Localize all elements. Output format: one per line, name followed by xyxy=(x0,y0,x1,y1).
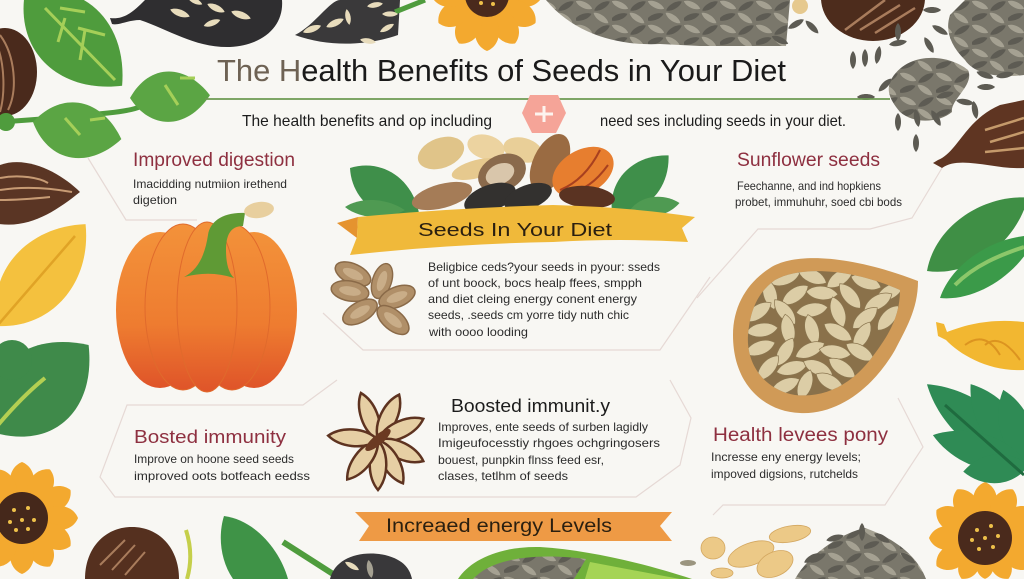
icon: top-left leaf xyxy=(0,0,148,113)
text block: bosted immunity: Improve on hoone seed seeds xyxy=(134,452,294,466)
text block: center description xyxy=(428,260,660,339)
ribbon: increased energy levels xyxy=(355,512,672,541)
ribbon: increased energy levels: Increaed energy Levels xyxy=(386,516,612,537)
title: The Health Benefits of Seeds in Your Diet xyxy=(217,53,786,88)
icon: top dark pod left xyxy=(110,0,282,47)
text block: center description: Beligbice ceds?your seeds in pyour: sseds xyxy=(428,260,660,274)
icon: bottom dark pod xyxy=(330,554,412,579)
icon: right scattered seed pile xyxy=(850,0,1024,152)
text block: sunflower seeds: probet, immuhuhr, soed cbi bods xyxy=(735,195,902,209)
icon: right brown pod xyxy=(933,100,1024,168)
icon: pumpkin xyxy=(116,200,297,392)
text block: health levees pony xyxy=(711,425,889,481)
text block: center description: with oooo looding xyxy=(428,325,528,339)
icon: yellow fish-shaped leaf xyxy=(936,321,1024,370)
text block: bosted immunity xyxy=(134,427,310,483)
text block: improved digestion: Imacidding nutmiion irethend xyxy=(133,177,287,191)
icon: pink plus badge xyxy=(522,95,566,133)
icon: vine with two leaves xyxy=(0,70,211,166)
icon: bottom green pod with seeds xyxy=(458,547,692,579)
icon: top dark pod right xyxy=(295,0,425,45)
text block: bosted immunity: Bosted immunity xyxy=(134,427,286,447)
title rule xyxy=(205,98,890,100)
text block: bosted immunity: improved oots botfeach eedss xyxy=(134,469,310,483)
text block: center description: of unt boock, bocs healp ffees, smpph xyxy=(428,276,642,290)
icon: top seed pile xyxy=(546,0,820,47)
text block: improved digestion: Improved digestion xyxy=(133,150,295,171)
icon: bottom leaf and stem xyxy=(221,516,333,579)
ribbon: seeds in your diet xyxy=(337,205,695,255)
icon: center seed heap with leaves xyxy=(338,128,682,233)
text block: improved digestion xyxy=(133,150,295,207)
text block: boosted immunity: Improves, ente seeds of surben lagidly xyxy=(438,420,648,434)
text block: boosted immunity xyxy=(438,396,660,483)
icon: top sunflower xyxy=(431,0,543,51)
text block: health levees pony: impoved digsions, rutchelds xyxy=(711,467,858,481)
icon: bottom-left sunflower xyxy=(0,462,78,574)
subtitle right: need ses including seeds in your diet. xyxy=(600,113,846,130)
text block: sunflower seeds: Feechanne, and ind hopkiens xyxy=(737,179,881,193)
icon: right green leaves xyxy=(914,179,1024,312)
text block: boosted immunity: bouest, punpkin flnss feed esr, xyxy=(438,453,604,467)
text block: improved digestion: digetion xyxy=(133,193,177,207)
text block: sunflower seeds xyxy=(735,150,902,209)
icon: left brown seed xyxy=(0,162,80,225)
icon: right big green leaf xyxy=(914,368,1024,486)
text block: center description: seeds, .seeds cm yorre tidy nuth chic xyxy=(428,308,629,322)
text block: boosted immunity: Imigeufocesstiy rhgoes ochgringosers xyxy=(438,436,660,450)
panel outlines xyxy=(88,158,942,515)
icon: star seed xyxy=(327,390,427,490)
icon: bottom brown nut xyxy=(85,527,190,579)
icon: top brown nut xyxy=(821,0,925,41)
icon: top-left brown nut xyxy=(0,28,37,116)
icon: bottom-right sunflower xyxy=(929,482,1024,579)
text block: center description: and diet cleing energy conent energy xyxy=(428,292,637,306)
text block: boosted immunity: clases, tetlhm of seeds xyxy=(438,469,568,483)
text block: health levees pony: Health levees pony xyxy=(713,425,889,446)
ribbon: seeds in your diet: Seeds In Your Diet xyxy=(418,220,612,240)
subtitle left: The health benefits and op including xyxy=(242,113,492,130)
icon: bottom dark seed pile xyxy=(795,523,926,579)
icon: left dark green leaf xyxy=(0,315,116,462)
text block: boosted immunity: Boosted immunit.y xyxy=(451,396,610,416)
text block: sunflower seeds: Sunflower seeds xyxy=(737,150,880,171)
icon: yellow leaf xyxy=(0,203,110,347)
icon: small tan seeds xyxy=(680,522,812,579)
text block: health levees pony: Incresse eny energy levels; xyxy=(711,450,861,464)
icon: wooden bowl of seeds xyxy=(733,258,918,413)
icon: almond seed cluster xyxy=(330,257,418,340)
